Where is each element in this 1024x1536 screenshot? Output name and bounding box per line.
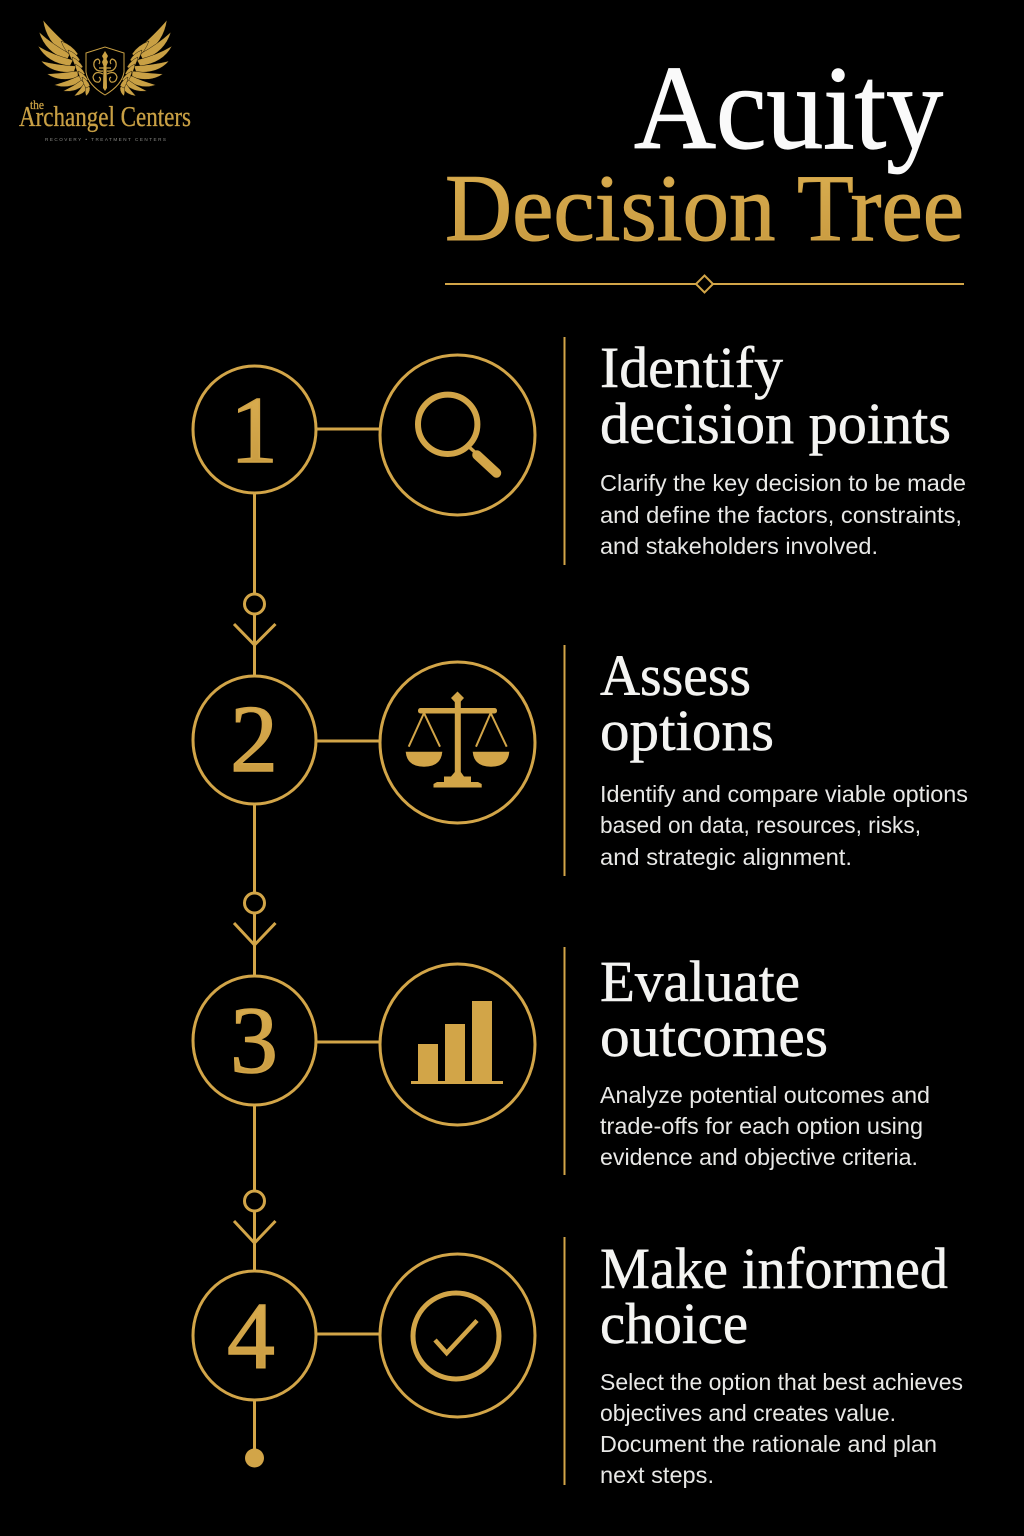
heading: decision points bbox=[600, 391, 951, 456]
logo wordmark: the bbox=[30, 97, 44, 112]
description: and define the factors, constraints, bbox=[600, 502, 962, 528]
number badge 2: 2 bbox=[230, 686, 278, 792]
heading bbox=[600, 949, 828, 1069]
description: and strategic alignment. bbox=[600, 844, 852, 870]
heading: choice bbox=[600, 1291, 748, 1356]
description: based on data, resources, risks, bbox=[600, 812, 921, 838]
heading: Identify bbox=[600, 335, 783, 400]
timeline connector 3 to 4 bbox=[234, 1105, 276, 1272]
description: evidence and objective criteria. bbox=[600, 1144, 918, 1170]
description: and stakeholders involved. bbox=[600, 533, 878, 559]
heading bbox=[600, 335, 951, 456]
icon: balance scales bbox=[380, 662, 535, 823]
heading bbox=[600, 1236, 948, 1356]
description bbox=[600, 781, 968, 870]
logo tagline: RECOVERY • TREATMENT CENTERS bbox=[45, 137, 166, 142]
icon: right wing bbox=[120, 20, 172, 96]
timeline connector 1 to 2 bbox=[234, 493, 276, 677]
step 1: identify decision points bbox=[193, 335, 966, 565]
title bbox=[445, 41, 964, 261]
heading: Make informed bbox=[600, 1236, 948, 1301]
title line: Acuity: Acuity bbox=[634, 41, 943, 174]
number badge 2 bbox=[193, 676, 316, 804]
step 4: make informed choice bbox=[193, 1236, 963, 1488]
icon: check mark bbox=[380, 1254, 535, 1417]
number badge 1: 1 bbox=[230, 377, 278, 483]
description: next steps. bbox=[600, 1462, 714, 1488]
heading: Evaluate bbox=[600, 949, 800, 1014]
number badge 3 bbox=[193, 976, 316, 1105]
icon: magnifying glass bbox=[380, 355, 535, 515]
timeline connector 2 to 3 bbox=[234, 804, 276, 977]
description: Select the option that best achieves bbox=[600, 1369, 963, 1395]
description bbox=[600, 1369, 963, 1488]
logo: The Archangel Centers bbox=[19, 20, 191, 142]
description: trade-offs for each option using bbox=[600, 1113, 923, 1139]
description bbox=[600, 1082, 930, 1170]
step 3: evaluate outcomes bbox=[193, 947, 930, 1175]
number badge 3: 3 bbox=[230, 987, 278, 1093]
icon: bar chart bbox=[380, 964, 535, 1125]
description: Identify and compare viable options bbox=[600, 781, 968, 807]
step 2: assess options bbox=[193, 643, 968, 876]
number badge 4 bbox=[193, 1271, 316, 1400]
title rule with diamond bbox=[445, 276, 964, 292]
description: Clarify the key decision to be made bbox=[600, 470, 966, 496]
heading: outcomes bbox=[600, 1004, 828, 1069]
description: objectives and creates value. bbox=[600, 1400, 896, 1426]
timeline end dot bbox=[245, 1400, 264, 1468]
heading bbox=[600, 643, 774, 763]
description: Analyze potential outcomes and bbox=[600, 1082, 930, 1108]
logo wordmark: Archangel Centers bbox=[19, 101, 191, 133]
description: Document the rationale and plan bbox=[600, 1431, 937, 1457]
heading: Assess bbox=[600, 643, 751, 708]
title line: Decision Tree: Decision Tree bbox=[445, 155, 964, 261]
description bbox=[600, 470, 966, 559]
heading: options bbox=[600, 698, 774, 763]
icon: left wing bbox=[38, 20, 90, 96]
number badge 1 bbox=[193, 366, 316, 493]
number badge 4: 4 bbox=[227, 1283, 275, 1389]
icon: shield with fleur bbox=[86, 47, 124, 95]
